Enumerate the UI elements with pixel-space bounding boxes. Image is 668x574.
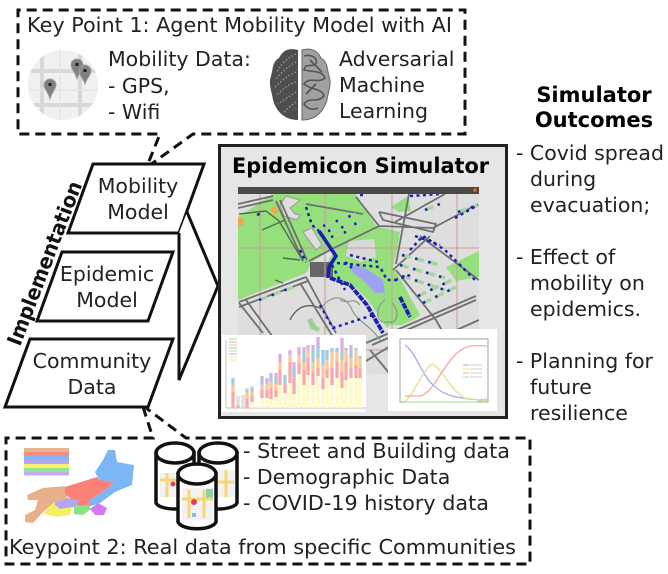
outcome: covid spread: during bbox=[530, 167, 596, 191]
heading: key point 1: Key Point 1: Agent Mobility Model with AI bbox=[27, 13, 452, 37]
text: mobility data: - GPS, bbox=[108, 74, 170, 98]
line chart bbox=[388, 329, 497, 411]
outcome: effect of mobility: mobility on bbox=[530, 271, 645, 295]
text: adversarial machine learning: Learning bbox=[339, 99, 428, 123]
arrow: into simulator bbox=[179, 212, 218, 380]
implementation label: Implementation bbox=[2, 178, 87, 349]
box: community data: Data bbox=[68, 375, 116, 399]
text: adversarial machine learning bbox=[339, 47, 454, 123]
box: mobility model: Mobility bbox=[98, 174, 178, 198]
cylinder: back left bbox=[156, 443, 194, 509]
box: mobility model: Model bbox=[107, 200, 169, 224]
panel: key point 2 bbox=[6, 407, 530, 564]
box: epidemic model: Epidemic bbox=[60, 262, 154, 286]
box: community data bbox=[5, 339, 173, 407]
dashed callout frame bbox=[6, 407, 530, 564]
outcome: effect of mobility bbox=[516, 245, 645, 321]
outcome: planning: - Planning for bbox=[516, 349, 653, 373]
stacked bars bbox=[233, 337, 360, 408]
text: data list bbox=[243, 439, 510, 515]
text: data list: - COVID-19 history data bbox=[243, 491, 489, 515]
panel: epidemicon simulator bbox=[220, 146, 506, 418]
dashed callout frame bbox=[18, 10, 465, 176]
text: adversarial machine learning: Adversarial bbox=[339, 47, 454, 71]
panel: key point 1 bbox=[18, 10, 465, 176]
box: epidemic model bbox=[37, 252, 173, 321]
box: community data: Community bbox=[33, 349, 151, 373]
icon: legend stripes bbox=[24, 448, 69, 476]
cylinder: back right bbox=[199, 443, 237, 509]
text: data list: - Demographic Data bbox=[243, 465, 450, 489]
heading: outcomes: Outcomes bbox=[535, 108, 653, 132]
outcome: covid spread: evacuation; bbox=[530, 193, 650, 217]
simulator frame bbox=[220, 146, 506, 418]
outcome: covid spread: - Covid spread bbox=[516, 141, 664, 165]
icon: brain bbox=[270, 49, 330, 120]
text: mobility data bbox=[108, 47, 251, 124]
outcome: effect of mobility: - Effect of bbox=[516, 245, 616, 269]
text: adversarial machine learning: Machine bbox=[339, 73, 425, 97]
text: mobility data: Mobility Data: bbox=[108, 47, 251, 71]
heading: simulator: Epidemicon Simulator bbox=[232, 154, 490, 178]
icon: state map bbox=[25, 450, 134, 523]
icon: database cylinders bbox=[156, 443, 237, 529]
box: epidemic model: Model bbox=[76, 288, 138, 312]
heading: key point 2: Keypoint 2: Real data from specific Communities bbox=[9, 535, 516, 559]
text: mobility data: - Wifi bbox=[108, 100, 160, 124]
outcome: covid spread bbox=[516, 141, 664, 217]
cylinder: front bbox=[178, 464, 216, 529]
heading: outcomes bbox=[535, 83, 653, 132]
map screenshot bbox=[238, 187, 479, 374]
text: data list: - Street and Building data bbox=[243, 439, 510, 463]
outcome: planning: future bbox=[530, 375, 592, 399]
heading: outcomes: Simulator bbox=[536, 83, 652, 107]
bar chart bbox=[222, 335, 366, 412]
outcome: planning: resilience bbox=[530, 401, 628, 425]
panel: simulator outcomes bbox=[516, 83, 664, 425]
outcome: planning bbox=[516, 349, 653, 425]
outcome: effect of mobility: epidemics. bbox=[530, 297, 641, 321]
box: mobility model bbox=[68, 164, 204, 233]
icon: map with pins bbox=[27, 49, 100, 120]
